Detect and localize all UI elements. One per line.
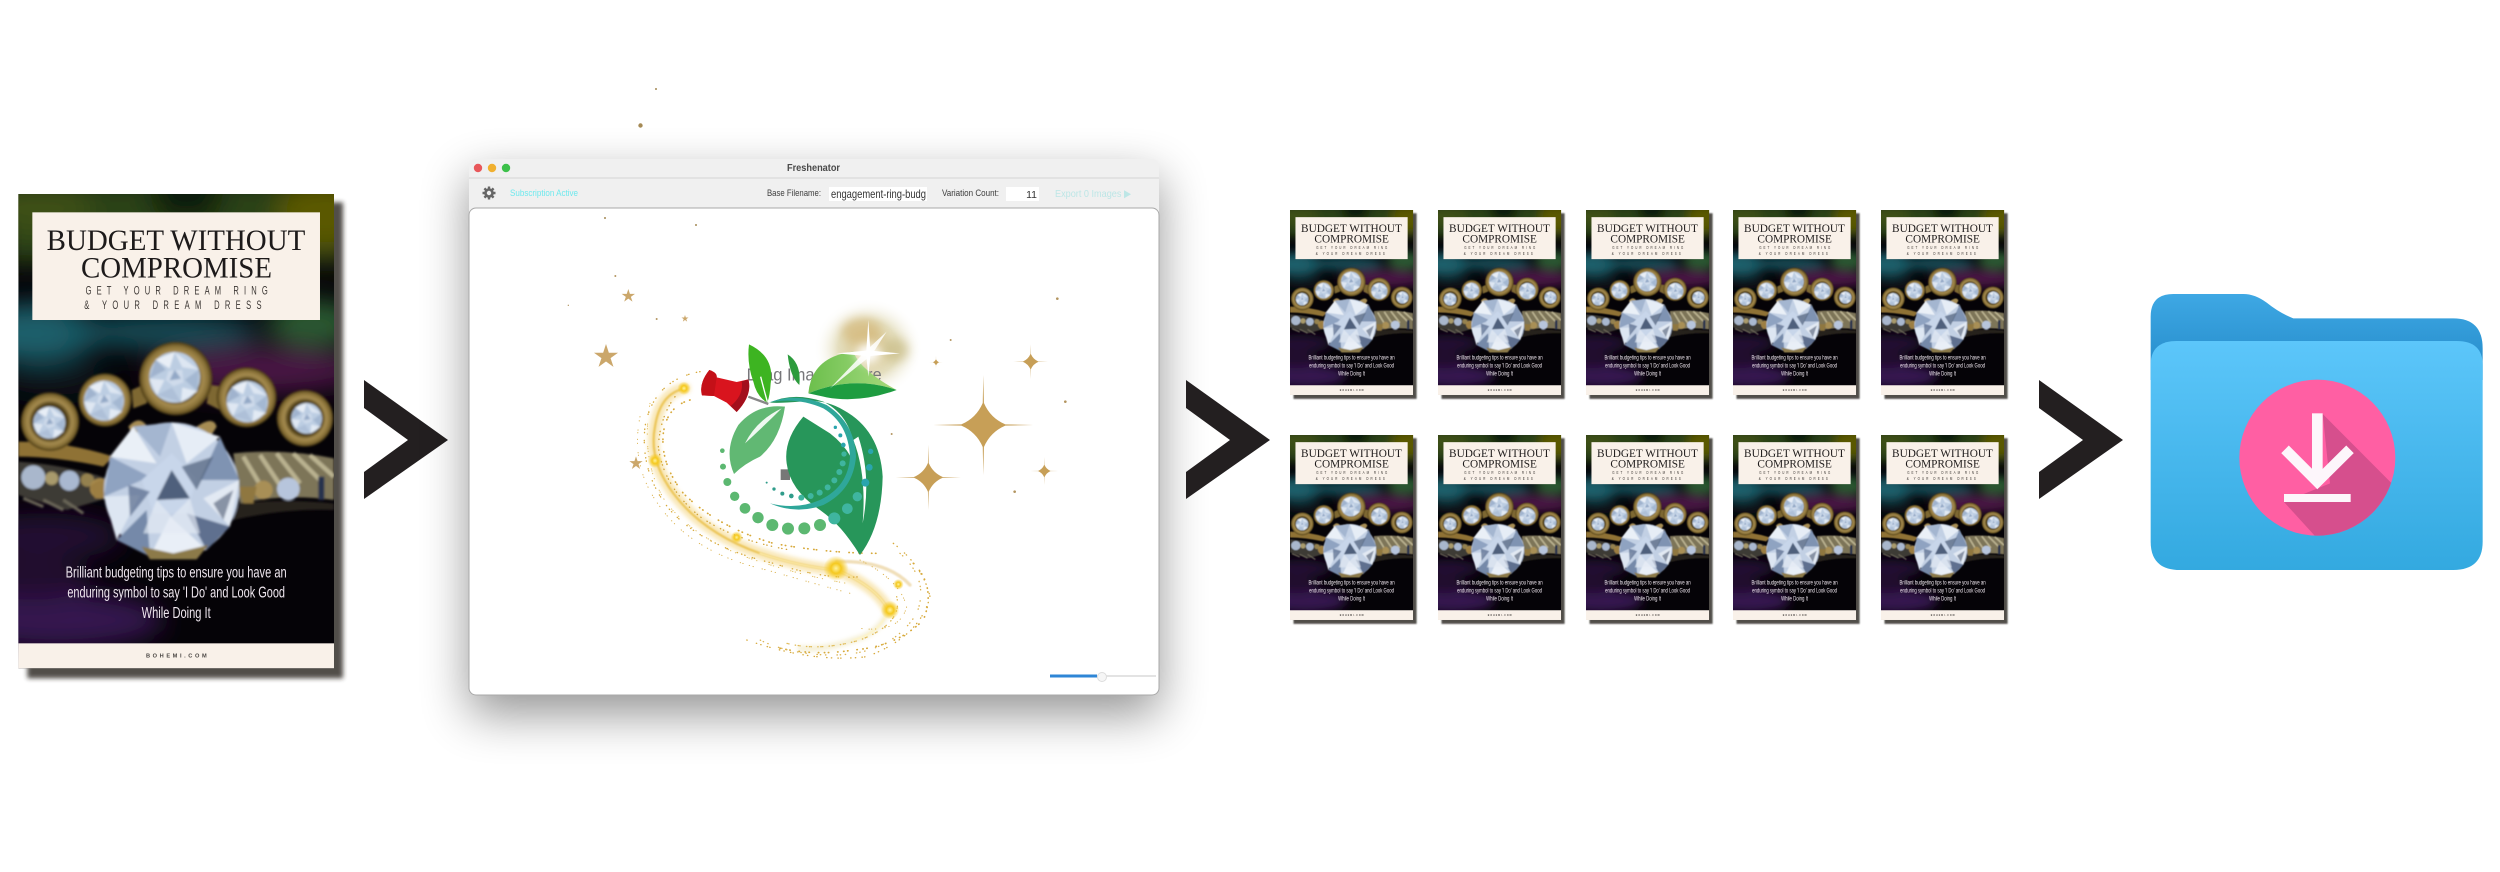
variation 6: While Doing It — [1338, 596, 1365, 602]
variation 10: BOHEMI.COM — [1931, 615, 1955, 617]
variation 5 — [1854, 203, 2021, 399]
window title: Freshenator — [787, 162, 840, 174]
variation 3 — [1559, 203, 1726, 399]
variation 9: BOHEMI.COM — [1783, 615, 1807, 617]
variation 2: While Doing It — [1486, 371, 1513, 377]
variation count input: 11 — [1026, 189, 1037, 201]
variation 10: & YOUR DREAM DRESS — [1907, 476, 1976, 481]
variation 1: Brilliant budgeting tips to ensure you have an — [1308, 356, 1395, 362]
variation 1: & YOUR DREAM DRESS — [1316, 251, 1385, 256]
variation 6: enduring symbol to say 'I Do' and Look Good — [1309, 588, 1394, 594]
variation 1: GET YOUR DREAM RING — [1316, 246, 1387, 250]
variation 4 — [1706, 203, 1873, 399]
window chrome — [469, 159, 1159, 695]
variation 9: BUDGET WITHOUT — [1744, 447, 1845, 460]
base filename label: Base Filename: — [767, 188, 821, 199]
variation 8: BOHEMI.COM — [1636, 615, 1660, 617]
variation 6 — [1263, 428, 1430, 624]
variation 2: BOHEMI.COM — [1488, 390, 1512, 392]
dotted spiral — [720, 426, 873, 535]
base filename input: engagement-ring-budg — [831, 187, 926, 201]
drop icon — [781, 469, 790, 480]
cover subtitle: GET YOUR DREAM RING — [86, 285, 268, 298]
variation 7 — [1411, 428, 1578, 624]
variation 8: Brilliant budgeting tips to ensure you have an — [1604, 581, 1691, 587]
variation 8 — [1559, 428, 1726, 624]
variation 6: Brilliant budgeting tips to ensure you have an — [1308, 581, 1395, 587]
variation 7: BOHEMI.COM — [1488, 615, 1512, 617]
cover title: BUDGET WITHOUT — [47, 224, 305, 257]
icon: download folder — [2151, 294, 2483, 570]
folder back with tab — [2151, 294, 2483, 380]
stray sparkles above window — [604, 88, 697, 226]
pink download badge — [2239, 380, 2395, 536]
variation 8: & YOUR DREAM DRESS — [1612, 476, 1681, 481]
variation 8: COMPROMISE — [1610, 458, 1685, 471]
export button: Export 0 Images ▶ — [1055, 188, 1132, 200]
title bar divider — [469, 177, 1159, 179]
variation 4: enduring symbol to say 'I Do' and Look Good — [1752, 363, 1837, 369]
variation 2: GET YOUR DREAM RING — [1464, 246, 1535, 250]
variation 3: Brilliant budgeting tips to ensure you have an — [1604, 356, 1691, 362]
arrow 1 — [364, 380, 448, 499]
variation 7: & YOUR DREAM DRESS — [1464, 476, 1533, 481]
variation 5: COMPROMISE — [1905, 233, 1980, 246]
drop prompt text: Drag Images Here — [747, 365, 882, 385]
variation 8: enduring symbol to say 'I Do' and Look Good — [1605, 588, 1690, 594]
variation 7: enduring symbol to say 'I Do' and Look Good — [1457, 588, 1542, 594]
subscription status: Subscription Active — [510, 188, 578, 199]
input cover: Budget Without Compromise — [0, 177, 377, 678]
variation 5: Brilliant budgeting tips to ensure you have an — [1899, 356, 1986, 362]
cover body line 2: enduring symbol to say 'I Do' and Look Good — [67, 585, 285, 602]
variation 9 — [1706, 428, 1873, 624]
variation 10 — [1854, 428, 2021, 624]
variation 9: COMPROMISE — [1757, 458, 1832, 471]
variation 5: BOHEMI.COM — [1931, 390, 1955, 392]
gold stars — [594, 289, 688, 469]
variation 3: & YOUR DREAM DRESS — [1612, 251, 1681, 256]
app window: Freshenator — [469, 159, 1159, 695]
variation 2: Brilliant budgeting tips to ensure you have an — [1456, 356, 1543, 362]
content area — [469, 208, 1159, 695]
arrow 2 — [1186, 380, 1270, 499]
variation 2: COMPROMISE — [1462, 233, 1537, 246]
variation 9: GET YOUR DREAM RING — [1759, 471, 1830, 475]
variation 1 — [1263, 203, 1430, 399]
variation 6: COMPROMISE — [1314, 458, 1389, 471]
lens glow — [813, 298, 923, 398]
variation 8: BUDGET WITHOUT — [1597, 447, 1698, 460]
variation 2: & YOUR DREAM DRESS — [1464, 251, 1533, 256]
variation 10: While Doing It — [1929, 596, 1956, 602]
dropped artwork: logo, pin and gold swirl — [568, 275, 1067, 658]
variation 4: Brilliant budgeting tips to ensure you have an — [1751, 356, 1838, 362]
variation 1: While Doing It — [1338, 371, 1365, 377]
variation 3: COMPROMISE — [1610, 233, 1685, 246]
variation 1: COMPROMISE — [1314, 233, 1389, 246]
progress slider — [1050, 672, 1156, 682]
variation 10: enduring symbol to say 'I Do' and Look Good — [1900, 588, 1985, 594]
variation 2: BUDGET WITHOUT — [1449, 222, 1550, 235]
variation 7: GET YOUR DREAM RING — [1464, 471, 1535, 475]
red push pin — [701, 370, 768, 412]
variation 8: While Doing It — [1634, 596, 1661, 602]
variation 1: BUDGET WITHOUT — [1301, 222, 1402, 235]
traffic light controls — [474, 164, 510, 172]
variation 3: BUDGET WITHOUT — [1597, 222, 1698, 235]
variation 8: GET YOUR DREAM RING — [1612, 471, 1683, 475]
badge long shadow — [2284, 414, 2391, 536]
cover footer: BOHEMI.COM — [146, 654, 207, 660]
variation 5: While Doing It — [1929, 371, 1956, 377]
cover body text: Brilliant budgeting tips to ensure you have an — [66, 564, 287, 581]
variation 6: & YOUR DREAM DRESS — [1316, 476, 1385, 481]
arrow 3 — [2039, 380, 2123, 499]
variation 5: & YOUR DREAM DRESS — [1907, 251, 1976, 256]
variation 4: & YOUR DREAM DRESS — [1759, 251, 1828, 256]
swirl light nodes — [648, 382, 904, 619]
variation 2: enduring symbol to say 'I Do' and Look Good — [1457, 363, 1542, 369]
variation 4: COMPROMISE — [1757, 233, 1832, 246]
lens flare — [830, 320, 900, 388]
variation 7: Brilliant budgeting tips to ensure you have an — [1456, 581, 1543, 587]
gold swirl — [637, 372, 930, 658]
variation 3: enduring symbol to say 'I Do' and Look Good — [1605, 363, 1690, 369]
app window shadow — [469, 178, 1159, 714]
variation 9: enduring symbol to say 'I Do' and Look Good — [1752, 588, 1837, 594]
variation 4: BOHEMI.COM — [1783, 390, 1807, 392]
cover subtitle line 2: & YOUR DREAM DRESS — [84, 300, 262, 313]
variation 1: BOHEMI.COM — [1340, 390, 1364, 392]
variation 10: Brilliant budgeting tips to ensure you have an — [1899, 581, 1986, 587]
variation 9: While Doing It — [1781, 596, 1808, 602]
variation 2 — [1411, 203, 1578, 399]
variation 5: GET YOUR DREAM RING — [1907, 246, 1978, 250]
variation 5: enduring symbol to say 'I Do' and Look Good — [1900, 363, 1985, 369]
variation 9: & YOUR DREAM DRESS — [1759, 476, 1828, 481]
variation 3: GET YOUR DREAM RING — [1612, 246, 1683, 250]
gold sparkles — [568, 275, 1067, 510]
variation 6: BOHEMI.COM — [1340, 615, 1364, 617]
variation 1: enduring symbol to say 'I Do' and Look Good — [1309, 363, 1394, 369]
variation 4: GET YOUR DREAM RING — [1759, 246, 1830, 250]
variation 7: BUDGET WITHOUT — [1449, 447, 1550, 460]
variation 10: BUDGET WITHOUT — [1892, 447, 1993, 460]
variation 7: COMPROMISE — [1462, 458, 1537, 471]
download arrow — [2284, 413, 2351, 502]
variation count label: Variation Count: — [942, 188, 999, 199]
variation 10: COMPROMISE — [1905, 458, 1980, 471]
variation 9: Brilliant budgeting tips to ensure you have an — [1751, 581, 1838, 587]
folder front — [2151, 341, 2483, 570]
output grid: ten cover variations — [1263, 203, 2021, 624]
variation 6: BUDGET WITHOUT — [1301, 447, 1402, 460]
cover title line 2: COMPROMISE — [81, 252, 272, 285]
cover body line 3: While Doing It — [142, 605, 211, 622]
variation 3: While Doing It — [1634, 371, 1661, 377]
variation 4: BUDGET WITHOUT — [1744, 222, 1845, 235]
variation 4: While Doing It — [1781, 371, 1808, 377]
leaf logo — [730, 344, 897, 555]
variation count input — [1006, 187, 1039, 201]
variation 10: GET YOUR DREAM RING — [1907, 471, 1978, 475]
cover artwork — [0, 177, 377, 678]
variation 3: BOHEMI.COM — [1636, 390, 1660, 392]
variation 5: BUDGET WITHOUT — [1892, 222, 1993, 235]
variation 7: While Doing It — [1486, 596, 1513, 602]
settings gear icon — [482, 186, 496, 200]
variation 6: GET YOUR DREAM RING — [1316, 471, 1387, 475]
